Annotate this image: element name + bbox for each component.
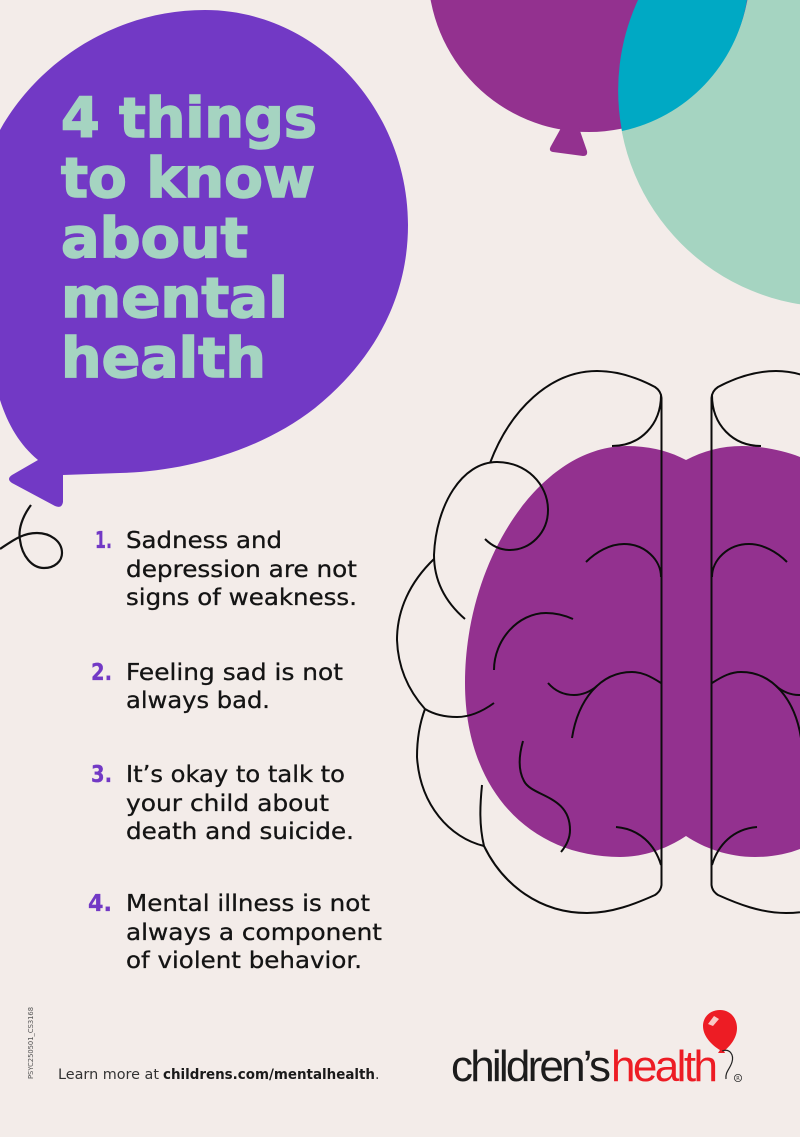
footer link <box>58 1067 379 1083</box>
logo wordmark: health <box>611 1042 718 1091</box>
item 3: It’s okay to talk to <box>126 762 345 788</box>
title: 4 things <box>61 86 317 150</box>
brain fill <box>465 446 800 857</box>
item 3 <box>91 762 354 845</box>
logo wordmark: children’s <box>451 1042 611 1091</box>
item 1: Sadness and <box>126 528 282 554</box>
list of four things <box>88 528 382 974</box>
title: about <box>61 206 248 270</box>
item 4: Mental illness is not <box>126 891 370 917</box>
title: mental <box>61 266 288 330</box>
item 2 <box>91 660 343 714</box>
item 2: 2. <box>91 660 112 686</box>
title balloon <box>0 10 408 507</box>
item 2: Feeling sad is not <box>126 660 343 686</box>
logo registered mark <box>734 1074 742 1082</box>
item 1: 1. <box>95 528 112 554</box>
title: to know <box>61 146 315 210</box>
item 4 <box>88 891 382 974</box>
title: health <box>61 326 266 390</box>
item 4: of violent behavior. <box>126 948 362 974</box>
balloon string <box>0 505 62 568</box>
decorative balloons top right <box>428 0 800 307</box>
title <box>61 86 317 390</box>
item 1: signs of weakness. <box>126 585 357 611</box>
brain outline: right hemisphere <box>712 371 800 913</box>
item 1: depression are not <box>126 557 357 583</box>
footer link: . <box>375 1067 379 1083</box>
item 3: death and suicide. <box>126 819 354 845</box>
balloon: purple <box>428 0 750 156</box>
item 2: always bad. <box>126 688 270 714</box>
logo balloon <box>703 1010 737 1079</box>
logo registered mark: R <box>736 1076 740 1082</box>
item 4: 4. <box>88 891 112 917</box>
balloon: teal <box>618 0 800 307</box>
item 3: your child about <box>126 791 329 817</box>
logo wordmark <box>451 1042 718 1091</box>
footer link: Learn more at <box>58 1067 160 1083</box>
item 4: always a component <box>126 920 382 946</box>
brain outline: left hemisphere <box>397 371 662 913</box>
footer link: childrens.com/mentalhealth <box>163 1067 375 1083</box>
item 1 <box>95 528 357 611</box>
logo: Children's Health <box>451 1010 742 1091</box>
print code: PSYC250501_CS3168 <box>27 1007 35 1079</box>
balloon overlap: blue <box>618 0 747 131</box>
item 3: 3. <box>91 762 112 788</box>
brain illustration <box>397 371 800 913</box>
